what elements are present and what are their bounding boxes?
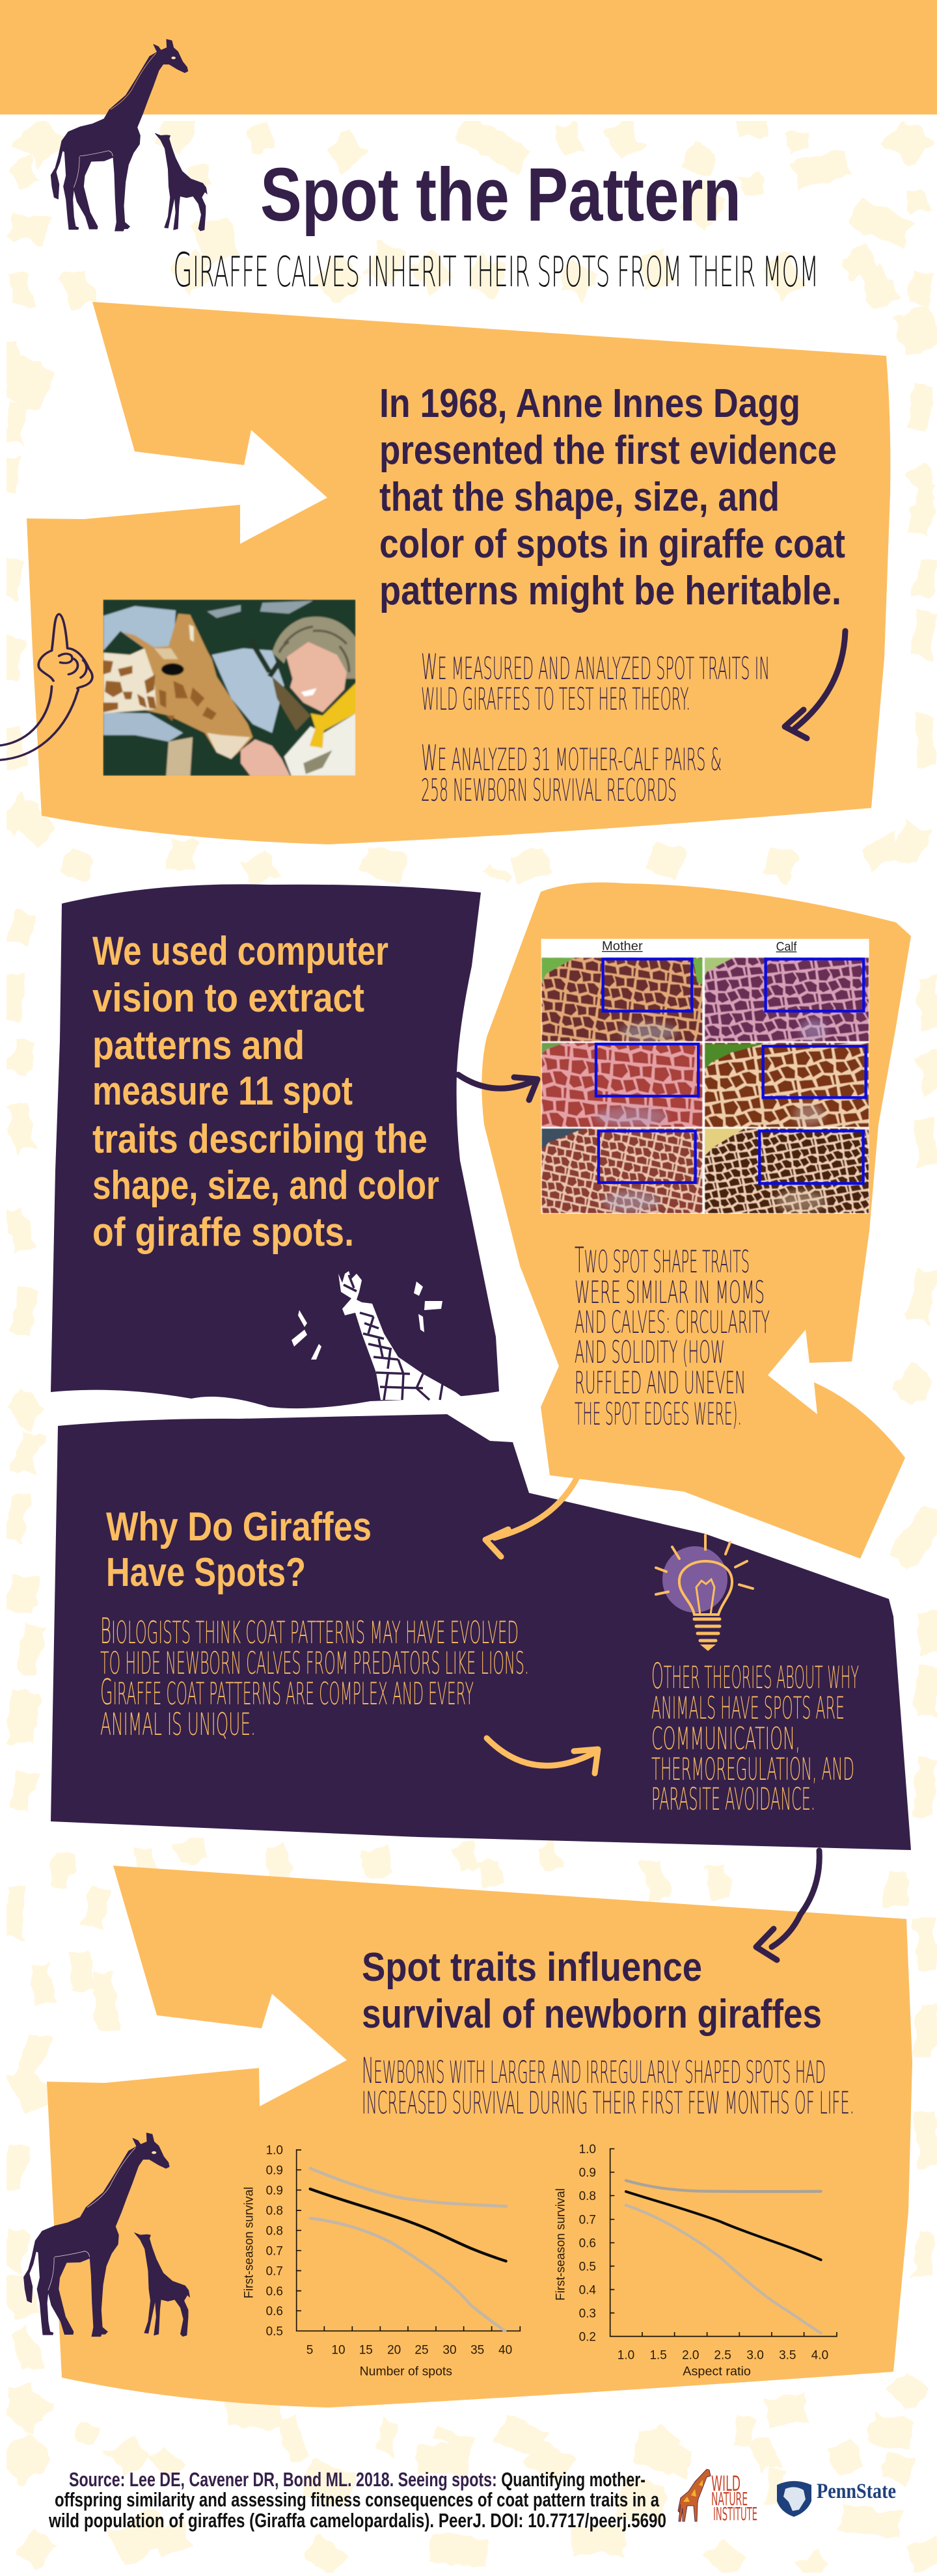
chart: survival vs number of spots: 0.7 — [266, 2264, 283, 2278]
heading: why do giraffes have spots: Why Do Giraffes — [106, 1505, 372, 1550]
chart: survival vs aspect ratio: Aspect ratio — [683, 2365, 751, 2379]
chart: survival vs number of spots: 25 — [414, 2343, 429, 2357]
source citation — [48, 2468, 666, 2532]
panel shape — [482, 883, 911, 1559]
text: other theories: COMMUNICATION, — [651, 1721, 800, 1757]
heading: spot traits influence survival: survival of newborn giraffes — [362, 1992, 822, 2037]
tile: calf 1 — [705, 958, 869, 1041]
panel: Anne Innes Dagg — [0, 302, 890, 844]
panel: computer vision — [51, 884, 499, 1408]
tile: mother 3 — [542, 1129, 702, 1213]
image: mother and calf coat patterns — [541, 939, 869, 1214]
heading: computer vision: measure 11 spot — [92, 1069, 353, 1114]
chart: survival vs number of spots: 0.6 — [266, 2285, 283, 2298]
heading: computer vision: We used computer — [92, 929, 388, 974]
heading: 1968 evidence: presented the first evidence — [379, 428, 837, 473]
chart: survival vs aspect ratio: 0.8 — [579, 2190, 596, 2203]
logo: Wild Nature Institute: NATURE — [711, 2488, 748, 2510]
tile: calf 3 — [705, 1129, 869, 1213]
chart: survival vs number of spots: Number of spots — [360, 2365, 452, 2379]
chart: survival vs number of spots: 0.6 — [266, 2305, 283, 2318]
chart: survival vs aspect ratio: 1.0 — [618, 2349, 634, 2363]
text: hiding from predators: ANIMAL IS UNIQUE. — [100, 1707, 256, 1743]
arrow: orange to other theories — [487, 1738, 598, 1773]
text: two spot shape traits: AND SOLIDITY (HOW — [575, 1335, 725, 1371]
text: two spot shape traits — [575, 1240, 770, 1432]
text: hiding from predators — [100, 1611, 529, 1743]
heading: computer vision: traits describing the — [92, 1117, 428, 1162]
text: other theories — [651, 1656, 859, 1818]
chart: survival vs number of spots: 10 — [331, 2343, 346, 2357]
arrow: orange to why heading — [485, 1479, 577, 1557]
chart: survival vs number of spots: 1.0 — [266, 2144, 283, 2158]
heading: 1968 evidence: that the shape, size, and — [379, 475, 780, 520]
text: two spot shape traits: RUFFLED AND UNEVEN — [575, 1365, 746, 1401]
chart: survival vs aspect ratio: 4.0 — [811, 2349, 828, 2363]
chart: survival vs number of spots: 40 — [498, 2343, 512, 2357]
source citation: Source: Lee DE, Cavener DR, Bond ML. 2018. Seeing spots: Quantifying mother- — [69, 2468, 645, 2491]
chart: survival vs aspect ratio: 1.0 — [579, 2143, 596, 2156]
chart: survival vs aspect ratio: 0.9 — [579, 2166, 596, 2180]
panel: why do giraffes have spots — [51, 1414, 911, 1850]
panel shape — [51, 884, 499, 1408]
photo: Anne Innes Dagg feeding a giraffe — [103, 600, 355, 776]
chart: survival vs number of spots: 0.5 — [266, 2325, 283, 2339]
panel: survival of newborn giraffes — [24, 1866, 912, 2408]
arrow: to survival panel — [756, 1851, 819, 1960]
heading: 1968 evidence: patterns might be heritable. — [379, 569, 841, 613]
heading: why do giraffes have spots: Have Spots? — [106, 1550, 306, 1595]
title: Spot the Pattern — [260, 152, 741, 237]
tile: calf 2 — [705, 1043, 869, 1127]
column label: Mother: Mother — [602, 940, 643, 954]
chart: survival vs aspect ratio: 0.2 — [579, 2330, 596, 2344]
arrow: to coat pattern image — [458, 1075, 537, 1100]
chart: survival vs aspect ratio: 1.5 — [649, 2349, 667, 2363]
source citation: offspring similarity and assessing fitness consequences of coat pattern traits in a — [55, 2488, 660, 2511]
column label: Calf: Calf — [776, 940, 797, 954]
heading: computer vision: patterns and — [92, 1023, 305, 1068]
chart: survival vs number of spots: 20 — [387, 2343, 401, 2357]
blue selection boxes — [596, 959, 866, 1183]
chart: survival vs aspect ratio: First-season survival — [554, 2188, 567, 2301]
panel shape — [51, 1414, 911, 1850]
icon: light bulb — [656, 1535, 753, 1651]
source citation: wild population of giraffes (Giraffa camelopardalis). PeerJ. DOI: 10.7717/peerj.5690 — [48, 2509, 666, 2532]
chart: survival vs aspect ratio: 0.6 — [579, 2236, 596, 2250]
chart: survival vs aspect ratio: 3.5 — [779, 2349, 796, 2363]
heading: computer vision — [92, 929, 439, 1255]
chart: survival vs number of spots: 0.8 — [266, 2205, 283, 2218]
text: two spot shape traits: WERE SIMILAR IN MOMS — [575, 1275, 765, 1311]
text: INSTITUTE — [713, 2503, 757, 2525]
hazy underbelly patches — [594, 1019, 826, 1212]
text: spot traits measured — [421, 647, 770, 809]
logo: Penn State: PennState — [817, 2480, 896, 2503]
chart: survival vs aspect ratio: 2.5 — [714, 2349, 731, 2363]
logo: Wild Nature Institute: WILD — [711, 2471, 740, 2496]
heading: 1968 evidence: In 1968, Anne Innes Dagg — [379, 381, 800, 426]
heading: computer vision: shape, size, and color — [92, 1163, 439, 1208]
chart: survival vs aspect ratio: 2.0 — [682, 2349, 699, 2363]
chart: survival vs aspect ratio: 0.4 — [579, 2283, 596, 2297]
icon: white giraffe neck with spots — [292, 1271, 466, 1400]
heading: spot traits influence survival: Spot traits influence — [362, 1945, 702, 1990]
logo: Wild Nature Institute — [678, 2469, 757, 2525]
panel shape — [47, 1866, 912, 2408]
tile: mother 1 — [542, 958, 702, 1041]
heading: computer vision: of giraffe spots. — [92, 1210, 354, 1255]
text: hiding from predators: BIOLOGISTS THINK COAT PATTERNS MAY HAVE EVOLVED — [100, 1611, 519, 1652]
icon: mother and calf giraffes, bottom — [24, 2133, 190, 2337]
text: hiding from predators: GIRAFFE COAT PATTERNS ARE COMPLEX AND EVERY — [100, 1672, 474, 1713]
icon: pointing hand — [0, 614, 92, 760]
heading: 1968 evidence: color of spots in giraffe coat — [379, 522, 845, 567]
chart: survival vs number of spots: 30 — [442, 2343, 457, 2357]
icon: mother and calf giraffes, top — [51, 40, 207, 231]
panel shape with cut-out arrow — [27, 302, 890, 844]
logo: Penn State — [777, 2480, 896, 2517]
chart: survival vs number of spots: 5 — [306, 2343, 313, 2357]
text: newborn survival finding — [362, 2050, 854, 2121]
chart: survival vs number of spots — [242, 2144, 520, 2379]
chart: survival vs number of spots: 0.7 — [266, 2244, 283, 2258]
chart: survival vs number of spots: 0.9 — [266, 2184, 283, 2197]
heading: computer vision: vision to extract — [92, 976, 364, 1021]
chart: survival vs number of spots: 0.8 — [266, 2224, 283, 2238]
heading: spot traits influence survival — [362, 1945, 822, 2037]
heading: 1968 evidence — [379, 381, 845, 613]
chart: survival vs aspect ratio — [554, 2143, 837, 2379]
chart: survival vs number of spots: 35 — [470, 2343, 484, 2357]
chart: survival vs aspect ratio: 0.3 — [579, 2307, 596, 2320]
tile: mother 2 — [542, 1043, 702, 1127]
header band — [0, 0, 937, 114]
arrow: down to text — [785, 631, 845, 738]
chart: survival vs number of spots: 15 — [359, 2343, 373, 2357]
chart: survival vs aspect ratio: 3.0 — [746, 2349, 764, 2363]
chart: survival vs number of spots: First-season survival — [242, 2187, 256, 2298]
chart: survival vs aspect ratio: 0.7 — [579, 2213, 596, 2227]
heading: why do giraffes have spots — [106, 1505, 372, 1595]
panel: mother calf comparison — [482, 883, 911, 1559]
chart: survival vs number of spots: 0.9 — [266, 2164, 283, 2177]
chart: survival vs aspect ratio: 0.5 — [579, 2260, 596, 2274]
